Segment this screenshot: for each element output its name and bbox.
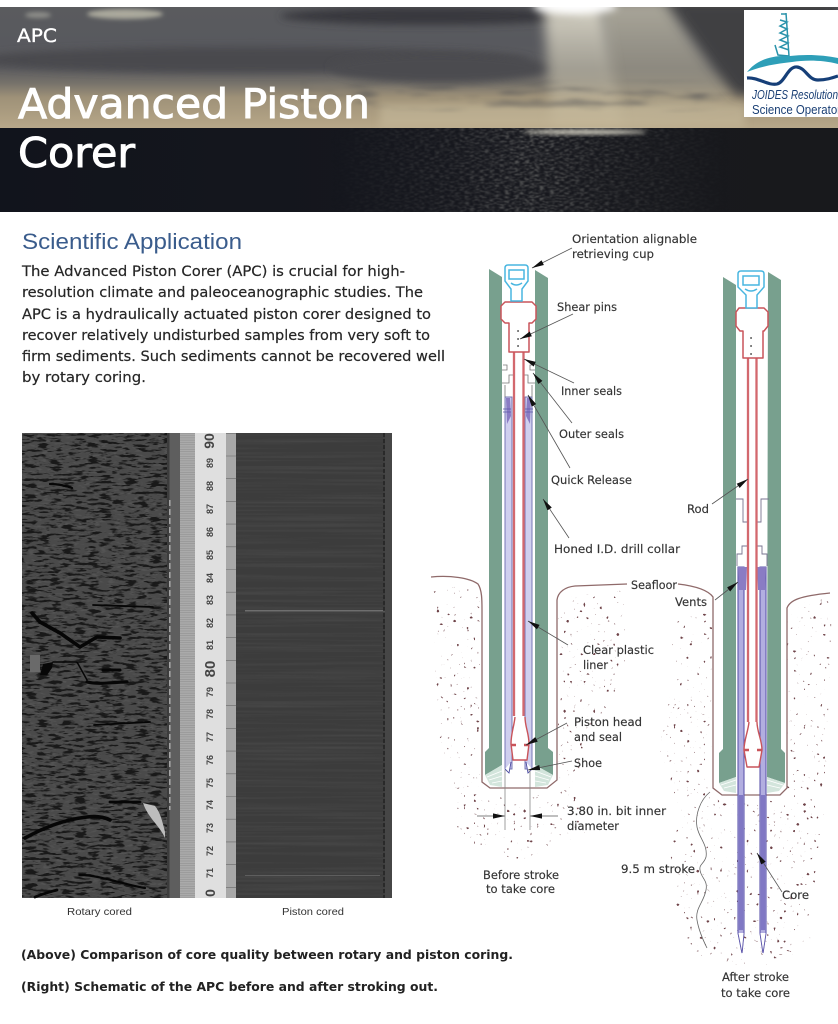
measuring ruler: 74	[205, 800, 215, 810]
inner seals and quick release	[502, 365, 535, 397]
diagram labels: Core	[782, 888, 809, 902]
diagram labels: Rod	[687, 502, 709, 516]
measuring ruler: 75	[205, 778, 215, 788]
diagram: APC before stroke	[485, 265, 553, 787]
measuring ruler: 79	[205, 687, 215, 697]
measuring ruler: 83	[205, 595, 215, 605]
measuring ruler: 87	[205, 504, 215, 514]
diagram labels: Shear pins	[557, 300, 617, 314]
diagram labels: 3.80 in. bit inner	[567, 804, 666, 818]
retrieving cup	[738, 271, 764, 308]
diagram labels: to take core	[721, 986, 790, 1000]
title	[18, 80, 370, 177]
header label: APC: APC	[17, 25, 57, 47]
title: Corer	[18, 129, 135, 177]
measuring ruler: 73	[205, 823, 215, 833]
body text	[21, 264, 445, 386]
label: piston cored: Piston cored	[282, 906, 344, 918]
measuring ruler: 80	[202, 661, 219, 677]
piston rod and head	[511, 352, 529, 760]
diagram labels: Clear plastic	[583, 643, 654, 657]
shear pins	[750, 338, 752, 354]
caption: right: (Right) Schematic of the APC before and after stroking out.	[21, 980, 438, 994]
logo: JOIDES Resolution Science Operator	[744, 10, 838, 117]
rod and piston head	[744, 358, 762, 767]
diagram labels	[483, 232, 809, 1000]
sediment stippling	[425, 575, 838, 975]
measuring ruler: 71	[205, 868, 215, 878]
measuring ruler: 81	[205, 640, 215, 650]
diagram: APC after stroke	[719, 271, 785, 953]
diagram labels: to take core	[486, 882, 555, 896]
shear pins	[517, 331, 519, 346]
diagram labels: Piston head	[574, 715, 642, 729]
piston cored core	[236, 433, 392, 898]
diagram labels: Honed I.D. drill collar	[554, 542, 680, 556]
retrieving cup	[505, 265, 528, 301]
seals housing	[736, 499, 769, 566]
rotary cored core	[22, 433, 167, 898]
body text: by rotary coring.	[22, 370, 146, 386]
diagram labels: and seal	[574, 730, 622, 744]
body text: APC is a hydraulically actuated piston corer designed to	[22, 307, 431, 323]
body text: firm sediments. Such sediments cannot be recovered well	[22, 349, 445, 365]
measuring ruler: 72	[205, 846, 215, 856]
measuring ruler: 85	[205, 550, 215, 560]
diagram labels: Shoe	[574, 756, 602, 770]
header banner: sky and ocean photo	[0, 0, 838, 212]
drill collar	[485, 269, 553, 787]
diagram labels: diameter	[567, 819, 619, 833]
body text: resolution climate and paleoceanographic studies. The	[22, 285, 423, 301]
body text: The Advanced Piston Corer (APC) is crucial for high-	[21, 264, 405, 280]
measuring ruler	[167, 433, 236, 898]
label: rotary cored: Rotary cored	[67, 906, 132, 918]
drill collar	[719, 272, 785, 793]
diagram labels: Seafloor	[631, 578, 677, 592]
clear plastic liner	[503, 397, 533, 773]
diagram labels: 9.5 m stroke	[621, 862, 695, 876]
measuring ruler: 90	[201, 433, 217, 449]
measuring ruler: 0	[202, 889, 218, 897]
body text: recover relatively undisturbed samples from very soft to	[22, 328, 430, 344]
diagram labels: Vents	[675, 595, 707, 609]
diagram labels: liner	[583, 658, 608, 672]
title: Advanced Piston	[18, 80, 370, 128]
measuring ruler: 82	[205, 618, 215, 628]
measuring ruler: 84	[205, 573, 215, 583]
diagram labels: Before stroke	[483, 868, 559, 882]
diagram labels: Quick Release	[551, 473, 632, 487]
diagram labels: After stroke	[722, 970, 789, 984]
diagram labels: Outer seals	[559, 427, 624, 441]
diagram labels: Orientation alignable	[572, 232, 697, 246]
diagram labels: Inner seals	[561, 384, 622, 398]
measuring ruler: 89	[205, 458, 215, 468]
measuring ruler: 78	[205, 709, 215, 719]
measuring ruler: 88	[205, 481, 215, 491]
caption: above: (Above) Comparison of core quality between rotary and piston coring.	[21, 948, 513, 962]
diagram labels: retrieving cup	[572, 247, 654, 261]
measuring ruler: 77	[205, 732, 215, 742]
core comparison photo	[22, 433, 392, 898]
measuring ruler: 76	[205, 755, 215, 765]
upper head	[501, 302, 536, 352]
upper head	[736, 308, 768, 358]
leaders and arrows	[477, 248, 782, 948]
seafloor and borehole outline	[431, 576, 830, 795]
liner and core	[738, 567, 766, 953]
heading: Scientific Application: Scientific Application	[22, 229, 242, 254]
measuring ruler: 86	[205, 527, 215, 537]
